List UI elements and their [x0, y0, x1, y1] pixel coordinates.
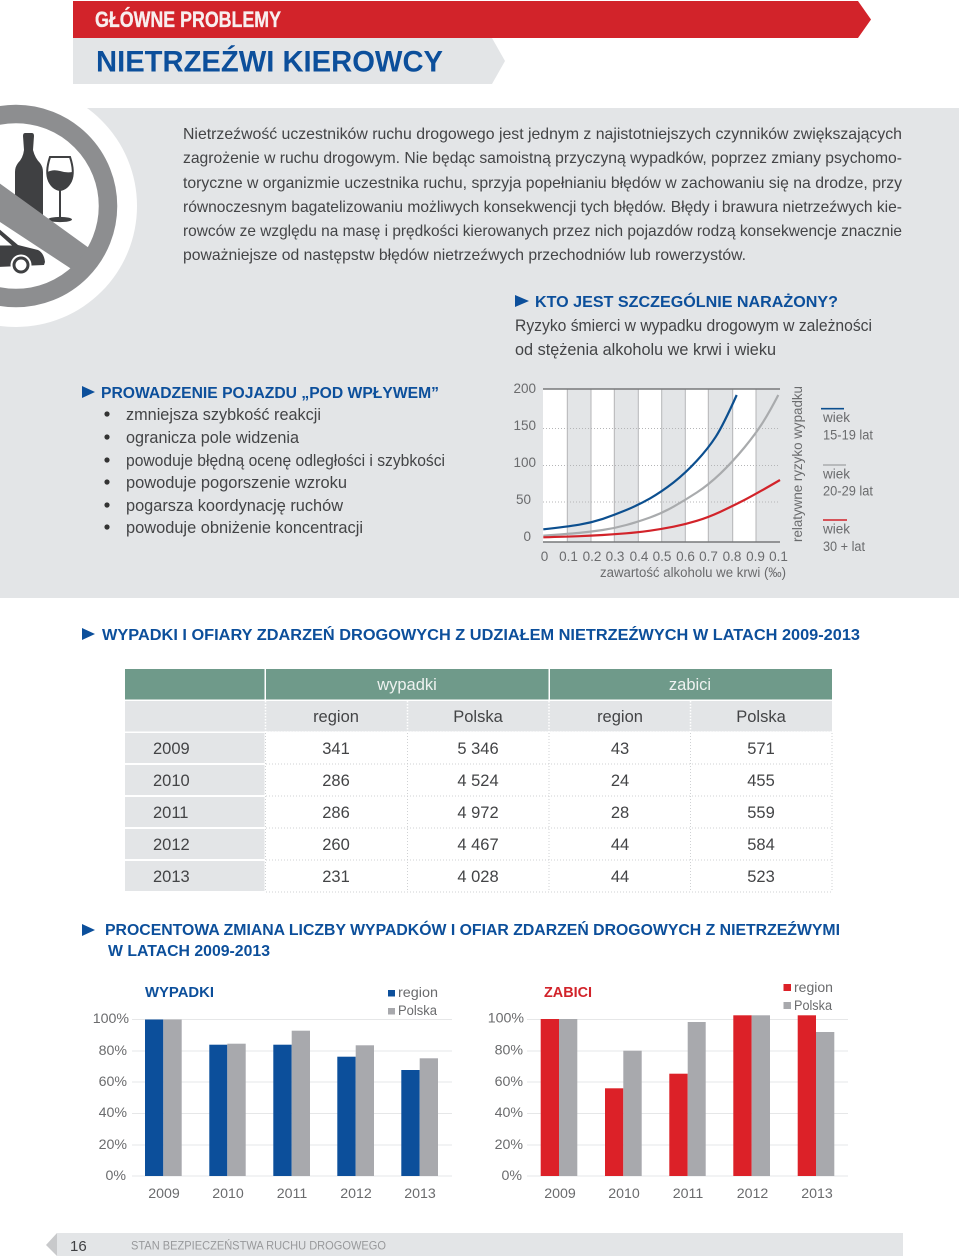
bar chart: zabici: ZABICI — [544, 985, 592, 1001]
intro text block: zagrożenie w ruchu drogowym. Nie będąc samoistną przyczyną wypadków, poprzez zmiany psychomo- — [183, 150, 902, 167]
bar chart: wypadki: 80% — [99, 1043, 127, 1059]
y axis labels: 200 — [513, 381, 536, 396]
heading: percentage change: PROCENTOWA ZMIANA LICZBY WYPADKÓW I OFIAR ZDARZEŃ DROGOWYCH Z NIETRZEŹWYMI — [105, 920, 840, 939]
y axis labels: 150 — [513, 418, 536, 433]
x axis labels: 0.4 — [630, 549, 649, 564]
bar chart: wypadki: 2010 — [212, 1186, 244, 1202]
bar chart: wypadki: 20% — [99, 1137, 127, 1153]
table: accidents and fatalities: 4 972 — [457, 804, 499, 822]
chart legend: age groups — [821, 409, 873, 554]
chart subtitle — [515, 317, 872, 359]
x axis labels: 0.7 — [699, 549, 718, 564]
panel: intro background — [0, 108, 959, 598]
bar chart: zabici: 80% — [495, 1042, 523, 1058]
table: accidents and fatalities: 44 — [611, 836, 629, 854]
table: accidents and fatalities: 260 — [322, 836, 350, 854]
legend: zabici — [784, 980, 833, 1014]
intro text block: poważniejsze od następstw błędów nietrzeźwych przechodniów lub rowerzystów. — [183, 247, 746, 264]
bar chart: zabici: 2012 — [737, 1186, 768, 1202]
y axis labels: 100 — [513, 455, 536, 470]
table: accidents and fatalities: 2012 — [153, 836, 190, 854]
chart subtitle: od stężenia alkoholu we krwi i wieku — [515, 341, 776, 359]
table: accidents and fatalities: wypadki — [376, 676, 437, 694]
table: accidents and fatalities: 455 — [747, 772, 775, 790]
bar chart: zabici: 2009 — [544, 1186, 576, 1202]
line chart: relative accident risk — [513, 381, 805, 580]
table: accidents and fatalities: 24 — [611, 772, 629, 790]
bar chart: wypadki: 40% — [99, 1105, 127, 1121]
bullet list: effects of alcohol — [104, 406, 445, 537]
icon: no drinking and driving sign — [0, 85, 137, 327]
bar chart: zabici — [488, 980, 848, 1202]
table: accidents and fatalities: 28 — [611, 804, 629, 822]
legend: wypadki: region — [398, 985, 438, 1001]
bar chart: zabici: 2013 — [801, 1186, 833, 1202]
bar chart: zabici: 20% — [495, 1137, 523, 1153]
table: accidents and fatalities — [125, 669, 832, 892]
table: accidents and fatalities: 286 — [322, 804, 350, 822]
legend: zabici: region — [794, 980, 833, 996]
x axis labels: 0.8 — [723, 549, 741, 564]
footer band — [46, 1233, 903, 1256]
bullet list: effects of alcohol: pogarsza koordynację ruchów — [126, 497, 343, 515]
title: nietrzeźwi kierowcy: NIETRZEŹWI KIEROWCY — [96, 44, 443, 78]
y axis labels: 0 — [523, 529, 531, 544]
table: accidents and fatalities: 571 — [747, 740, 775, 758]
table: accidents and fatalities: 2010 — [153, 772, 190, 790]
chart legend: age groups: wiek — [822, 522, 850, 536]
bar chart: wypadki: 0% — [105, 1168, 126, 1184]
bar chart: wypadki: 2012 — [340, 1186, 372, 1202]
table: accidents and fatalities: 584 — [747, 836, 775, 854]
line chart: relative accident risk: relatywne ryzyko wypadku — [790, 386, 805, 542]
table: accidents and fatalities: 341 — [322, 740, 350, 758]
table: accidents and fatalities: 2009 — [153, 740, 190, 758]
bar chart: wypadki: WYPADKI — [145, 985, 214, 1001]
bar chart: wypadki: 2011 — [277, 1186, 307, 1202]
table: accidents and fatalities: zabici — [669, 676, 711, 694]
table: accidents and fatalities: 231 — [322, 868, 350, 886]
table: accidents and fatalities: region — [597, 708, 643, 726]
chart legend: age groups: 15-19 lat — [823, 428, 873, 442]
table: accidents and fatalities: Polska — [453, 708, 504, 726]
table: accidents and fatalities: 2011 — [153, 804, 188, 822]
bar chart: zabici: 100% — [488, 1010, 524, 1026]
bullet list: effects of alcohol: powoduje obniżenie koncentracji — [126, 519, 363, 537]
bullet list: effects of alcohol: ogranicza pole widzenia — [126, 429, 300, 447]
x axis labels: 0 — [541, 549, 548, 564]
intro text block: toryczne w organizmie uczestnika ruchu, sprzyja popełnianiu błędów w zachowaniu się na drodze, przy — [183, 175, 902, 192]
intro text block: Nietrzeźwość uczestników ruchu drogowego jest jednym z najistotniejszych czynników zwiększających — [183, 126, 902, 143]
footer band: 16 — [70, 1238, 87, 1255]
header band: główne problemy — [73, 1, 871, 38]
line chart: relative accident risk: zawartość alkoholu we krwi (‰) — [600, 565, 786, 580]
table: accidents and fatalities: 4 524 — [457, 772, 499, 790]
header band: główne problemy: GŁÓWNE PROBLEMY — [95, 7, 281, 32]
x axis labels: 0.3 — [606, 549, 624, 564]
bullet list: effects of alcohol: powoduje błędną ocenę odległości i szybkości — [126, 452, 445, 470]
x axis labels: 0.1 — [559, 549, 578, 564]
bar chart: wypadki: 100% — [93, 1011, 129, 1027]
table: accidents and fatalities: 43 — [611, 740, 629, 758]
table: accidents and fatalities: 44 — [611, 868, 629, 886]
title: nietrzeźwi kierowcy — [73, 38, 505, 84]
chart legend: age groups: 30 + lat — [823, 539, 865, 554]
chart legend: age groups: wiek — [822, 466, 850, 482]
heading: kto jest szczególnie narażony: KTO JEST SZCZEGÓLNIE NARAŻONY? — [535, 292, 838, 311]
table: accidents and fatalities: 4 028 — [457, 868, 499, 886]
legend: wypadki: Polska — [398, 1003, 437, 1019]
x axis labels: 0.9 — [746, 549, 765, 564]
table: accidents and fatalities: 5 346 — [457, 740, 499, 758]
heading: table: WYPADKI I OFIARY ZDARZEŃ DROGOWYCH Z UDZIAŁEM NIETRZEŹWYCH W LATACH 2009-2013 — [102, 625, 860, 644]
bullet list: effects of alcohol: zmniejsza szybkość reakcji — [126, 406, 321, 424]
heading: prowadzenie pojazdu pod wpływem: PROWADZENIE POJAZDU „POD WPŁYWEM” — [101, 385, 439, 402]
table: accidents and fatalities: 286 — [322, 772, 350, 790]
legend: zabici: Polska — [794, 998, 832, 1014]
y axis labels — [513, 381, 536, 544]
table: accidents and fatalities: 2013 — [153, 868, 190, 886]
table: accidents and fatalities: Polska — [736, 708, 787, 726]
footer band: STAN BEZPIECZEŃSTWA RUCHU DROGOWEGO — [131, 1238, 386, 1252]
chart legend: age groups: 20-29 lat — [823, 484, 873, 498]
x axis labels: 0.5 — [653, 549, 671, 564]
intro text block: równoczesnym bagatelizowaniu możliwych konsekwencji tych błędów. Błędy i brawura nietrzeźwych kie- — [183, 199, 902, 216]
bar chart: zabici: 40% — [495, 1105, 523, 1121]
bar chart: zabici: 0% — [501, 1168, 522, 1184]
bar chart: wypadki: 60% — [99, 1074, 127, 1090]
heading: percentage change: W LATACH 2009-2013 — [108, 943, 270, 960]
bar chart: zabici: 2011 — [673, 1186, 703, 1202]
bar chart: wypadki: 2013 — [404, 1186, 436, 1202]
bar chart: wypadki: 2009 — [148, 1186, 180, 1202]
intro text block — [183, 126, 902, 264]
x axis labels — [541, 549, 788, 564]
table: accidents and fatalities: 559 — [747, 804, 775, 822]
table: accidents and fatalities: 4 467 — [457, 836, 499, 854]
chart legend: age groups: wiek — [822, 410, 850, 425]
bar chart: zabici: 2010 — [608, 1186, 640, 1202]
legend: wypadki — [388, 985, 438, 1019]
table: accidents and fatalities: 523 — [747, 868, 775, 886]
bullet list: effects of alcohol: powoduje pogorszenie wzroku — [126, 474, 347, 492]
heading: percentage change — [82, 920, 840, 960]
x axis labels: 0.1 — [769, 549, 788, 564]
x axis labels: 0.6 — [676, 549, 695, 564]
y axis labels: 50 — [516, 492, 531, 507]
chart subtitle: Ryzyko śmierci w wypadku drogowym w zależności — [515, 317, 872, 335]
intro text block: rowców ze względu na masę i prędkości kierowanych przez nich pojazdów rodzą konsekwencje znacznie — [183, 223, 902, 240]
x axis labels: 0.2 — [583, 549, 601, 564]
bar chart: wypadki — [93, 985, 452, 1202]
table: accidents and fatalities: region — [313, 708, 359, 726]
bar chart: zabici: 60% — [495, 1074, 523, 1090]
